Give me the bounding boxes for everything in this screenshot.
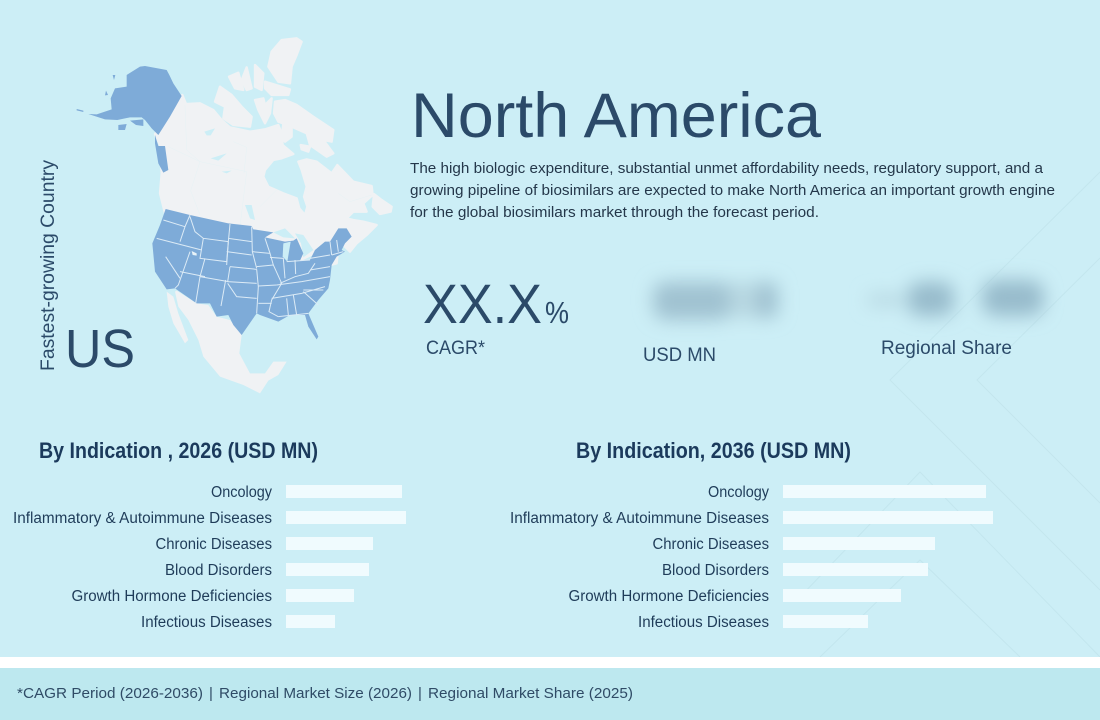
map: provincial borders	[168, 105, 372, 227]
bar labels 2026: Growth Hormone Deficiencies	[72, 588, 272, 605]
chart: By Indication 2026	[13, 438, 406, 631]
bars 2026	[286, 485, 406, 628]
stat: USD MN (blurred value): USD MN	[643, 345, 716, 366]
description paragraph: The high biologic expenditure, substantial unmet affordability needs, regulatory support, and a	[410, 160, 1044, 177]
bar labels 2036: Chronic Diseases	[652, 536, 769, 553]
great lakes	[273, 228, 316, 260]
white divider band	[0, 657, 1100, 668]
chart heading 2036: By Indication, 2036 (USD MN)	[576, 438, 851, 463]
bar labels 2036: Inflammatory & Autoimmune Diseases	[510, 510, 769, 527]
footnote text: Regional Market Share (2025)	[428, 685, 633, 702]
bar labels 2036: Blood Disorders	[662, 562, 769, 579]
stat: CAGR: CAGR*	[426, 338, 486, 359]
map: Alaska	[77, 66, 182, 173]
map of North America	[77, 38, 392, 393]
footer	[0, 668, 1100, 720]
map: Canadian lakes	[204, 128, 255, 220]
chart: By Indication 2036	[510, 438, 993, 631]
chart heading 2026: By Indication , 2026 (USD MN)	[39, 438, 318, 463]
stat: CAGR	[423, 272, 569, 359]
utah lake	[192, 251, 197, 256]
stat: CAGR: %	[545, 295, 569, 330]
description paragraph: growing pipeline of biosimilars are expected to make North America an important growth engine	[410, 182, 1055, 199]
country name: US: US	[65, 319, 135, 379]
bar labels 2026: Oncology	[211, 484, 272, 501]
footnote text: Regional Market Size (2026)	[219, 685, 412, 702]
stat: Regional Share (blurred value): Regional Share	[881, 338, 1012, 359]
bar labels 2026	[13, 484, 272, 631]
bar labels 2026: Blood Disorders	[165, 562, 272, 579]
footnote text: |	[418, 685, 422, 702]
bar labels 2026: Infectious Diseases	[141, 614, 272, 631]
map: Mexico	[167, 291, 287, 393]
bar labels 2036: Oncology	[708, 484, 769, 501]
footnote text	[17, 685, 633, 702]
footnote text: *CAGR Period (2026-2036)	[17, 685, 203, 702]
map: contiguous United States	[152, 209, 352, 339]
footnote text: |	[209, 685, 213, 702]
lower 48 shape	[152, 209, 352, 339]
title: North America	[411, 81, 822, 151]
bar labels 2026: Inflammatory & Autoimmune Diseases	[13, 510, 272, 527]
state borders	[157, 215, 343, 317]
bar labels 2036: Growth Hormone Deficiencies	[568, 588, 769, 605]
stat: USD MN (blurred value)	[643, 282, 778, 366]
bar labels 2036: Infectious Diseases	[638, 614, 769, 631]
bar labels 2036	[510, 484, 769, 631]
stat: CAGR: XX.X	[423, 272, 542, 335]
lake michigan	[283, 242, 291, 262]
rotated label: Fastest-growing Country: Fastest-growing Country	[38, 159, 59, 371]
description paragraph	[410, 160, 1055, 221]
map: Canada	[155, 38, 392, 270]
description paragraph: for the global biosimilars market through the forecast period.	[410, 204, 819, 221]
bars 2036	[783, 485, 993, 628]
stat: Regional Share (blurred value)	[868, 280, 1044, 359]
bar labels 2026: Chronic Diseases	[156, 536, 272, 553]
